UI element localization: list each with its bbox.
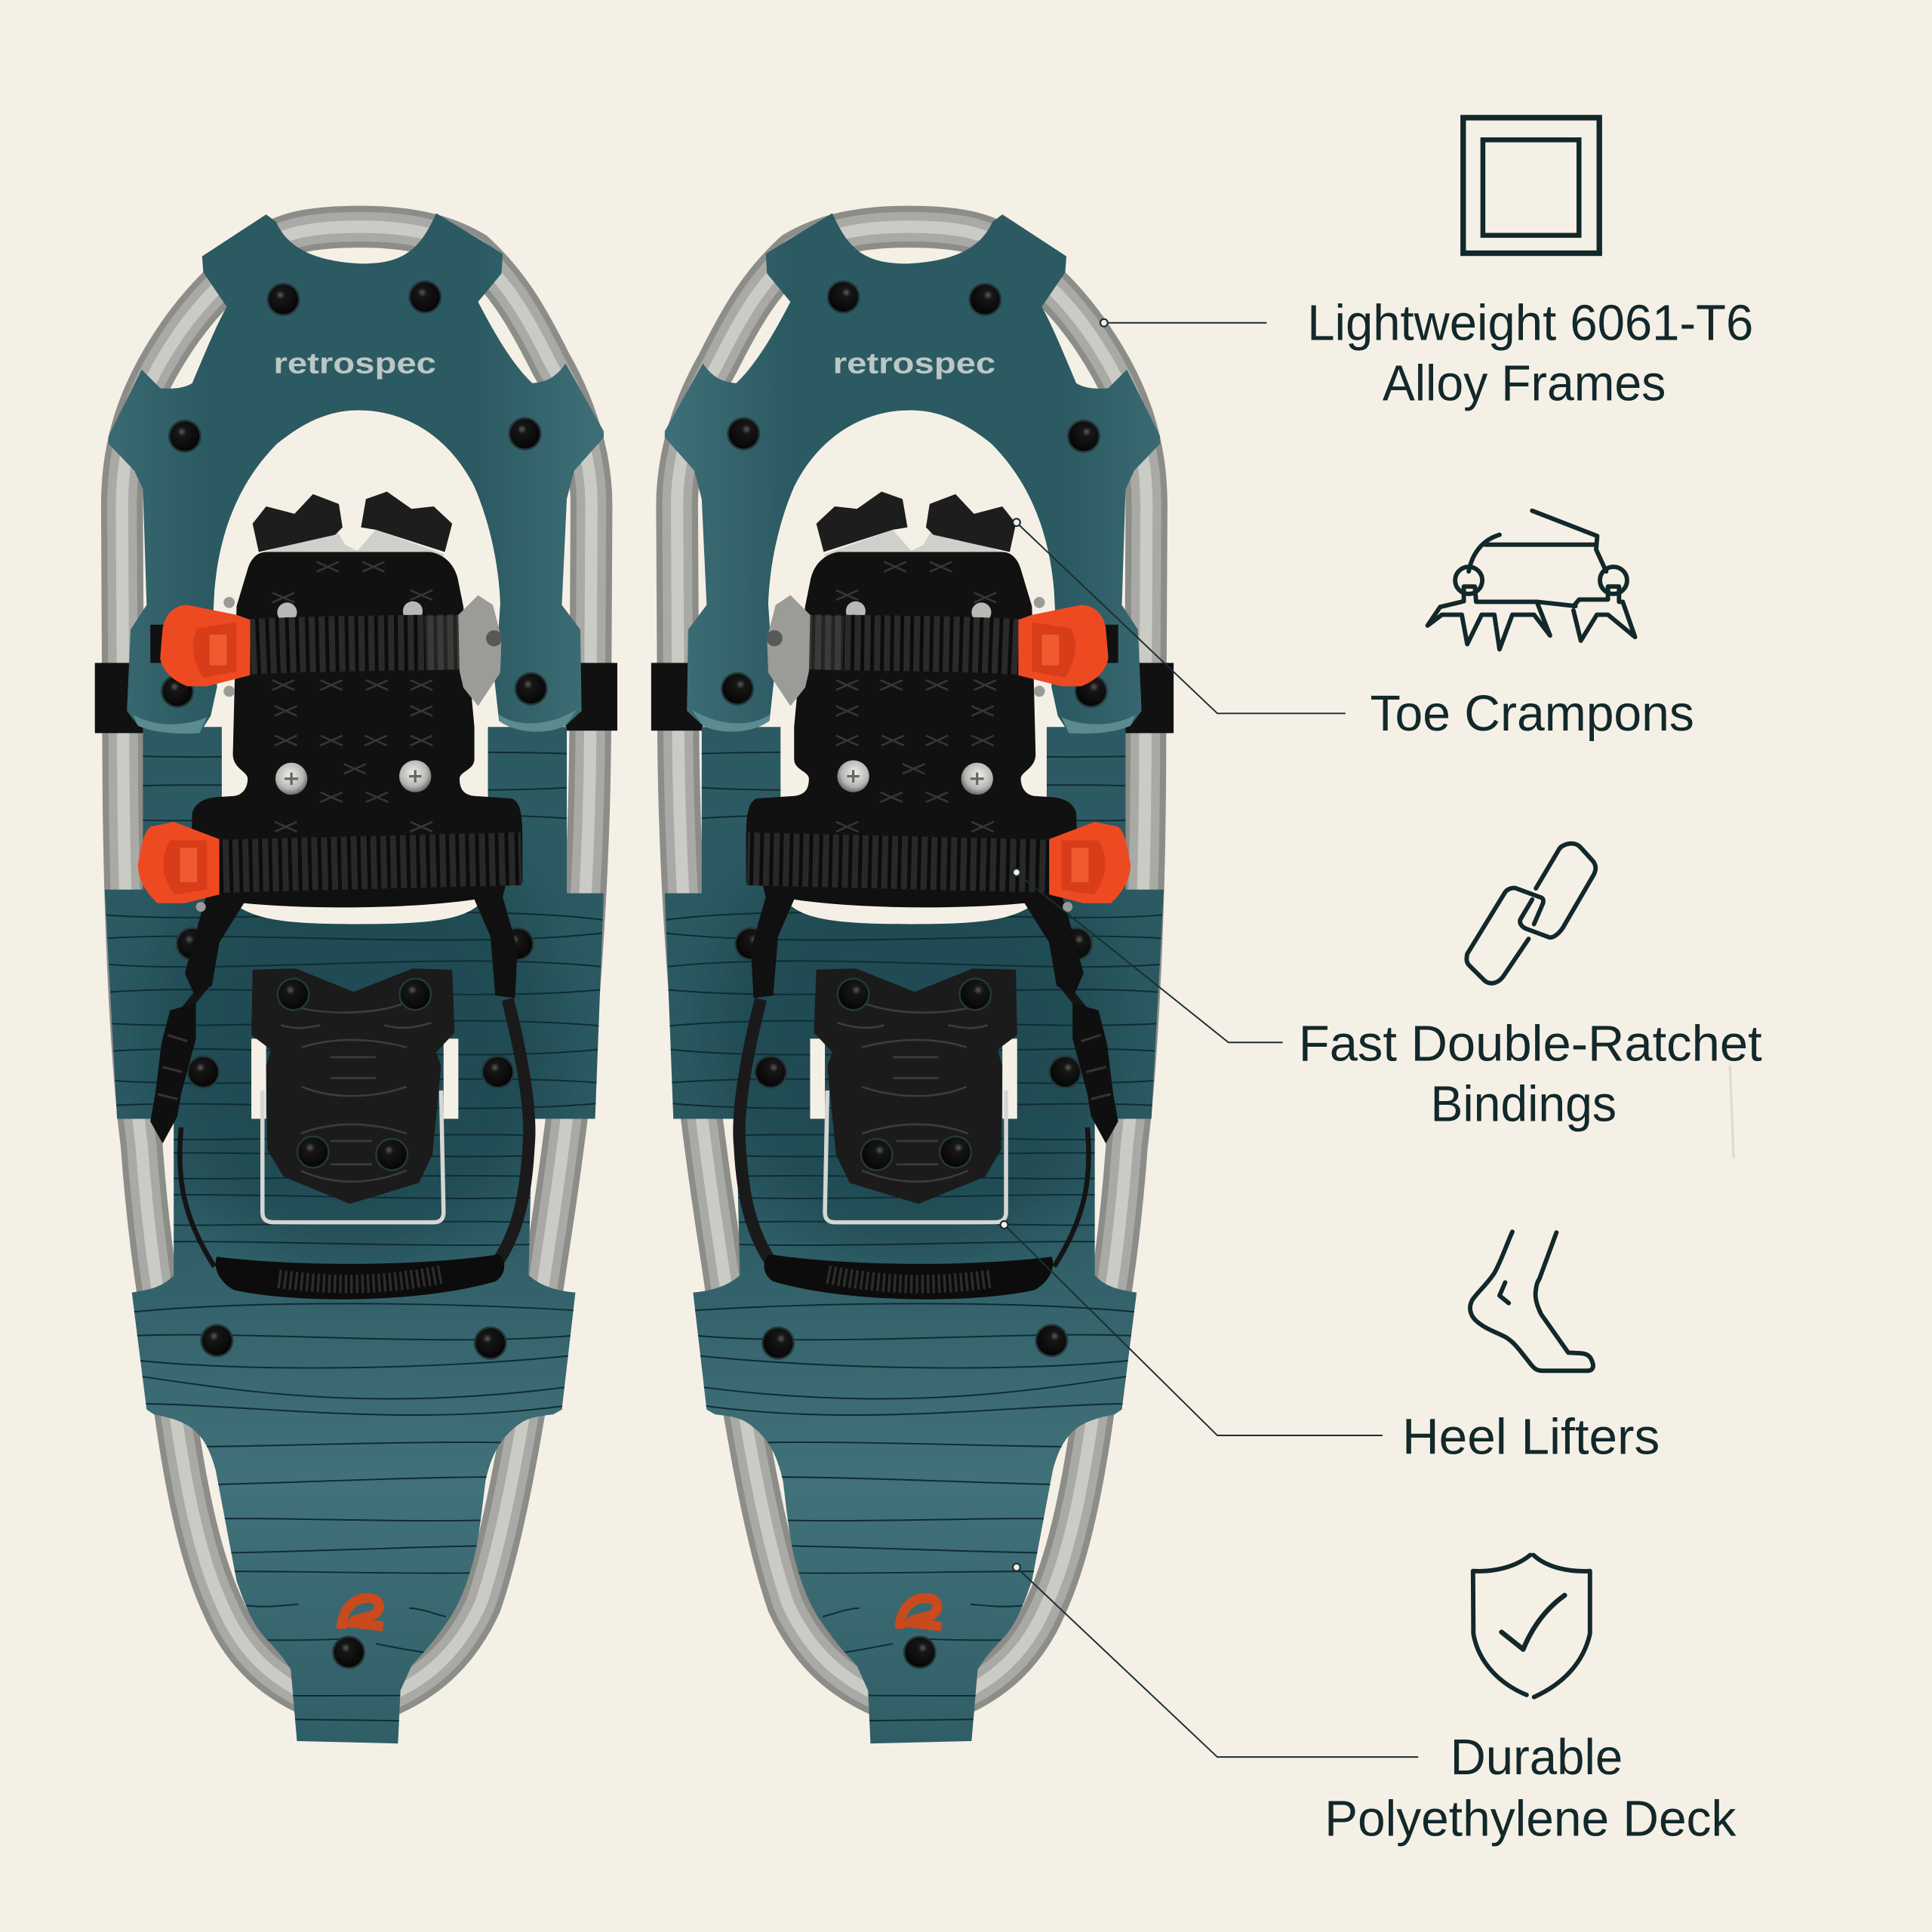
label: heel lifters: Heel Lifters — [1402, 1409, 1660, 1466]
lower ratchet strap — [220, 859, 521, 866]
label: toe crampons: Toe Crampons — [1371, 685, 1694, 742]
right heel lifter — [810, 968, 1017, 1223]
icon: foot heel — [1470, 1232, 1593, 1371]
toe crampons — [253, 491, 452, 569]
foot plate with X tread — [191, 552, 522, 892]
upper ratchet strap — [247, 642, 463, 647]
aluminium alloy tube frame — [122, 226, 592, 1710]
toe plate rivets — [161, 280, 548, 708]
callout line: toe crampons — [1013, 518, 1346, 713]
label: alloy frames — [1307, 295, 1753, 412]
heel lifter plate and wire bar — [251, 968, 458, 1223]
icon: frame squares — [1463, 118, 1599, 254]
label: bindings — [1299, 1016, 1762, 1133]
label: alloy frames: Alloy Frames — [1383, 355, 1666, 412]
left snowshoe — [95, 213, 617, 1743]
lower binding arms — [185, 877, 518, 998]
label: deck — [1324, 1729, 1737, 1847]
lower deck rivets — [176, 928, 534, 1669]
right lower buckle — [1049, 822, 1131, 912]
label: bindings: Fast Double-Ratchet — [1299, 1016, 1762, 1072]
right lower strap — [747, 859, 1049, 866]
brand wordmark left: retrospec — [273, 348, 436, 380]
right side straps — [740, 986, 1118, 1300]
brand wordmark right: retrospec — [833, 348, 995, 380]
label: alloy frames: Lightweight 6061-T6 — [1307, 295, 1753, 352]
right binding arms — [751, 877, 1084, 998]
polyethylene deck with contour lines — [99, 727, 616, 1743]
callout line: bindings — [1013, 869, 1283, 1042]
side straps and rear heel strap — [150, 986, 529, 1300]
upper toe plate — [109, 213, 604, 924]
right crampons — [817, 491, 1016, 569]
faint scratch mark — [1730, 1066, 1734, 1158]
orange logo mark left — [341, 1598, 383, 1629]
upper orange ratchet buckle — [150, 597, 250, 697]
right snowshoe (mirrored) — [651, 213, 1174, 1743]
icon: shield check — [1473, 1555, 1590, 1697]
lower orange ratchet buckle — [138, 822, 220, 912]
callout line: heel lifters — [1001, 1221, 1383, 1435]
right toe plate — [665, 213, 1160, 924]
right upper strap — [805, 642, 1022, 647]
label: deck: Polyethylene Deck — [1324, 1791, 1737, 1847]
right frame — [677, 226, 1146, 1710]
black frame straps — [95, 663, 617, 733]
lit lower lobes of the plate — [133, 709, 577, 734]
right upper buckle — [1018, 597, 1118, 697]
central deck opening — [212, 411, 500, 924]
callout line: alloy frames — [1100, 319, 1266, 327]
orange logo mark right — [900, 1598, 941, 1629]
icon: crampon — [1428, 511, 1635, 649]
right frame straps — [651, 663, 1174, 733]
right foot plate — [746, 552, 1078, 892]
silver ratchet mount — [458, 595, 502, 706]
infographic canvas — [95, 115, 1761, 1846]
right deck — [652, 727, 1170, 1743]
callout line: deck — [1013, 1564, 1418, 1757]
label: bindings: Bindings — [1431, 1076, 1617, 1133]
right silver mount — [767, 595, 810, 706]
label: deck: Durable — [1451, 1729, 1623, 1786]
icon: chain link — [1466, 844, 1595, 983]
